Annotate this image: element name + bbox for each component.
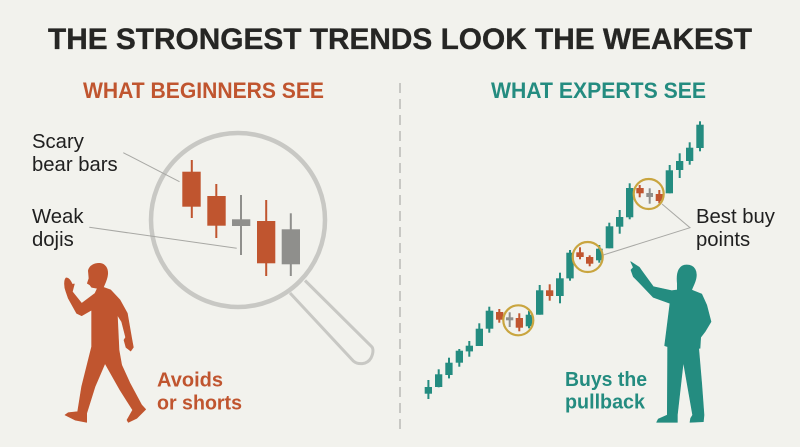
gold circle: pullback 2 — [573, 242, 603, 272]
label: avoids or shorts — [157, 370, 242, 414]
teal candles — [425, 121, 704, 399]
label: scary bear bars: Scary — [32, 131, 85, 153]
label: weak dojis: Weak — [32, 206, 84, 228]
label: best buy points — [603, 204, 776, 255]
label: buys the pullback: Buys the — [565, 369, 647, 391]
title: THE STRONGEST TRENDS LOOK THE WEAKEST — [48, 23, 752, 56]
gray doji candles — [506, 188, 653, 327]
icon: expert figure pointing — [631, 262, 711, 422]
candlesticks in magnifier — [182, 160, 300, 276]
label: best buy points: Best buy — [696, 206, 776, 228]
icon: beginner figure walking away — [64, 263, 146, 422]
label: buys the pullback: pullback — [565, 392, 646, 414]
label: weak dojis: dojis — [32, 229, 74, 251]
label: weak dojis — [32, 206, 237, 251]
heading: what beginners see: WHAT BEGINNERS SEE — [83, 78, 324, 103]
heading: what experts see: WHAT EXPERTS SEE — [491, 78, 706, 103]
label: best buy points: points — [696, 229, 750, 251]
label: avoids or shorts: or shorts — [157, 392, 242, 414]
gold circle: pullback 3 — [634, 179, 664, 209]
candlestick chart: uptrend — [425, 121, 704, 399]
icon: magnifying glass — [151, 133, 373, 364]
label: scary bear bars: bear bars — [32, 154, 118, 176]
red pullback candles — [496, 185, 663, 331]
gold circle: pullback 1 — [503, 305, 533, 335]
label: scary bear bars — [32, 131, 180, 182]
label: avoids or shorts: Avoids — [157, 370, 223, 392]
label: buys the pullback — [565, 369, 647, 414]
